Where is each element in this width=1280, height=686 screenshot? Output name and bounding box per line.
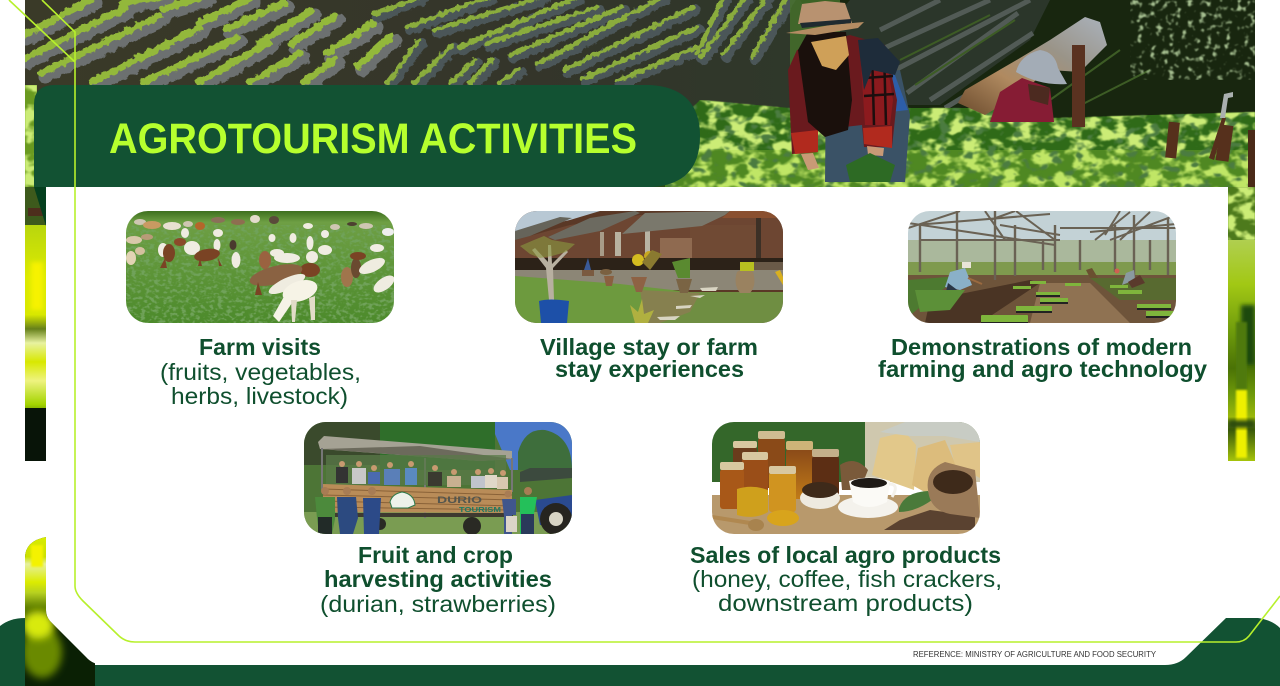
- photo: grazing goats: [126, 211, 397, 323]
- photo: greenhouse farming demonstration: [900, 211, 1176, 323]
- caption: harvesting: [320, 542, 556, 617]
- seated passengers: [336, 461, 508, 489]
- foliage left of banner: [25, 85, 37, 187]
- farm posts and pipe: [1165, 92, 1255, 190]
- scattered beans: [884, 510, 975, 530]
- nut basket: [840, 461, 868, 490]
- photo: honey, coffee and local products: [712, 422, 980, 534]
- coffee cup and saucer: [838, 478, 898, 518]
- caption: farm visits: herbs, livestock): [171, 383, 348, 409]
- photo: wooden bungalows: [515, 211, 783, 323]
- coffee bean bowl: [800, 482, 840, 509]
- caption: demonstrations: [878, 334, 1207, 382]
- burlap sack: [928, 462, 980, 518]
- caption: agro products: downstream products): [718, 590, 973, 616]
- greenhouse frame: [908, 211, 1176, 280]
- caption: farm visits: Farm visits: [199, 334, 321, 360]
- farm worker right: [1086, 268, 1145, 288]
- foliage foreground: [665, 100, 1255, 187]
- dark fold under header: [34, 187, 46, 226]
- background photo band: strawberry farm: [23, 0, 1255, 461]
- roofs: [515, 217, 572, 240]
- title banner: [34, 85, 700, 187]
- caption: agro products: [690, 542, 1002, 616]
- blurred lower-left photo strip: [22, 537, 95, 686]
- caption: village stay: stay experiences: [555, 356, 744, 382]
- path and lawn: [515, 270, 783, 290]
- caption: harvesting: harvesting activities: [324, 566, 552, 592]
- dark hillside: [790, 0, 1255, 120]
- title: AGROTOURISM ACTIVITIES: [109, 116, 637, 163]
- flower pots: [582, 250, 783, 323]
- caption: harvesting: Fruit and crop: [358, 542, 513, 568]
- sky corner: [515, 211, 600, 232]
- seedling trays: [981, 281, 1176, 323]
- caption: agro products: (honey, coffee, fish crackers,: [692, 566, 1002, 592]
- standing visitors: [315, 487, 537, 534]
- caption: demonstrations: Demonstrations of modern: [891, 334, 1192, 360]
- caption: agro products: Sales of local agro products: [690, 542, 1001, 568]
- tractor: [520, 468, 572, 535]
- blurred right edge strip: [1228, 187, 1255, 461]
- bungalow walls: [515, 215, 783, 258]
- tarp roll: [958, 17, 1107, 115]
- wagon roof: [318, 436, 512, 461]
- potted tree and blue pot: [520, 236, 575, 323]
- wooden wagon side with logo: [323, 484, 513, 535]
- reference note: REFERENCE: MINISTRY OF AGRICULTURE AND FOOD SECURITY: [913, 649, 1156, 659]
- white content panel: [46, 187, 1228, 665]
- honey dish and dipper: [712, 510, 799, 531]
- farm worker left: [945, 262, 982, 290]
- woman in hat picking strawberries: [786, 1, 910, 182]
- green leaves: [899, 491, 932, 512]
- caption: demonstrations: farming and agro technology: [878, 356, 1207, 382]
- caption: farm visits: [160, 334, 361, 409]
- worker in grey hat: [990, 45, 1085, 127]
- footer green band: [95, 618, 1280, 686]
- under-floor shadow: [515, 258, 783, 270]
- footer green left corner: [0, 618, 25, 686]
- photo: harvest tour wagon: [304, 422, 572, 535]
- caption: harvesting: (durian, strawberries): [320, 591, 556, 617]
- wooden wagon side with logo: TOURISM: [459, 505, 501, 514]
- cracker bags: [872, 422, 980, 495]
- terraced strawberry rows: [25, 0, 796, 108]
- caption: village stay: [540, 334, 758, 382]
- honey jars: [720, 431, 839, 517]
- wooden wagon side with logo: DURIO: [437, 495, 482, 505]
- caption: village stay: Village stay or farm: [540, 334, 758, 360]
- blurred left edge strip: [25, 187, 46, 461]
- caption: farm visits: (fruits, vegetables,: [160, 359, 361, 385]
